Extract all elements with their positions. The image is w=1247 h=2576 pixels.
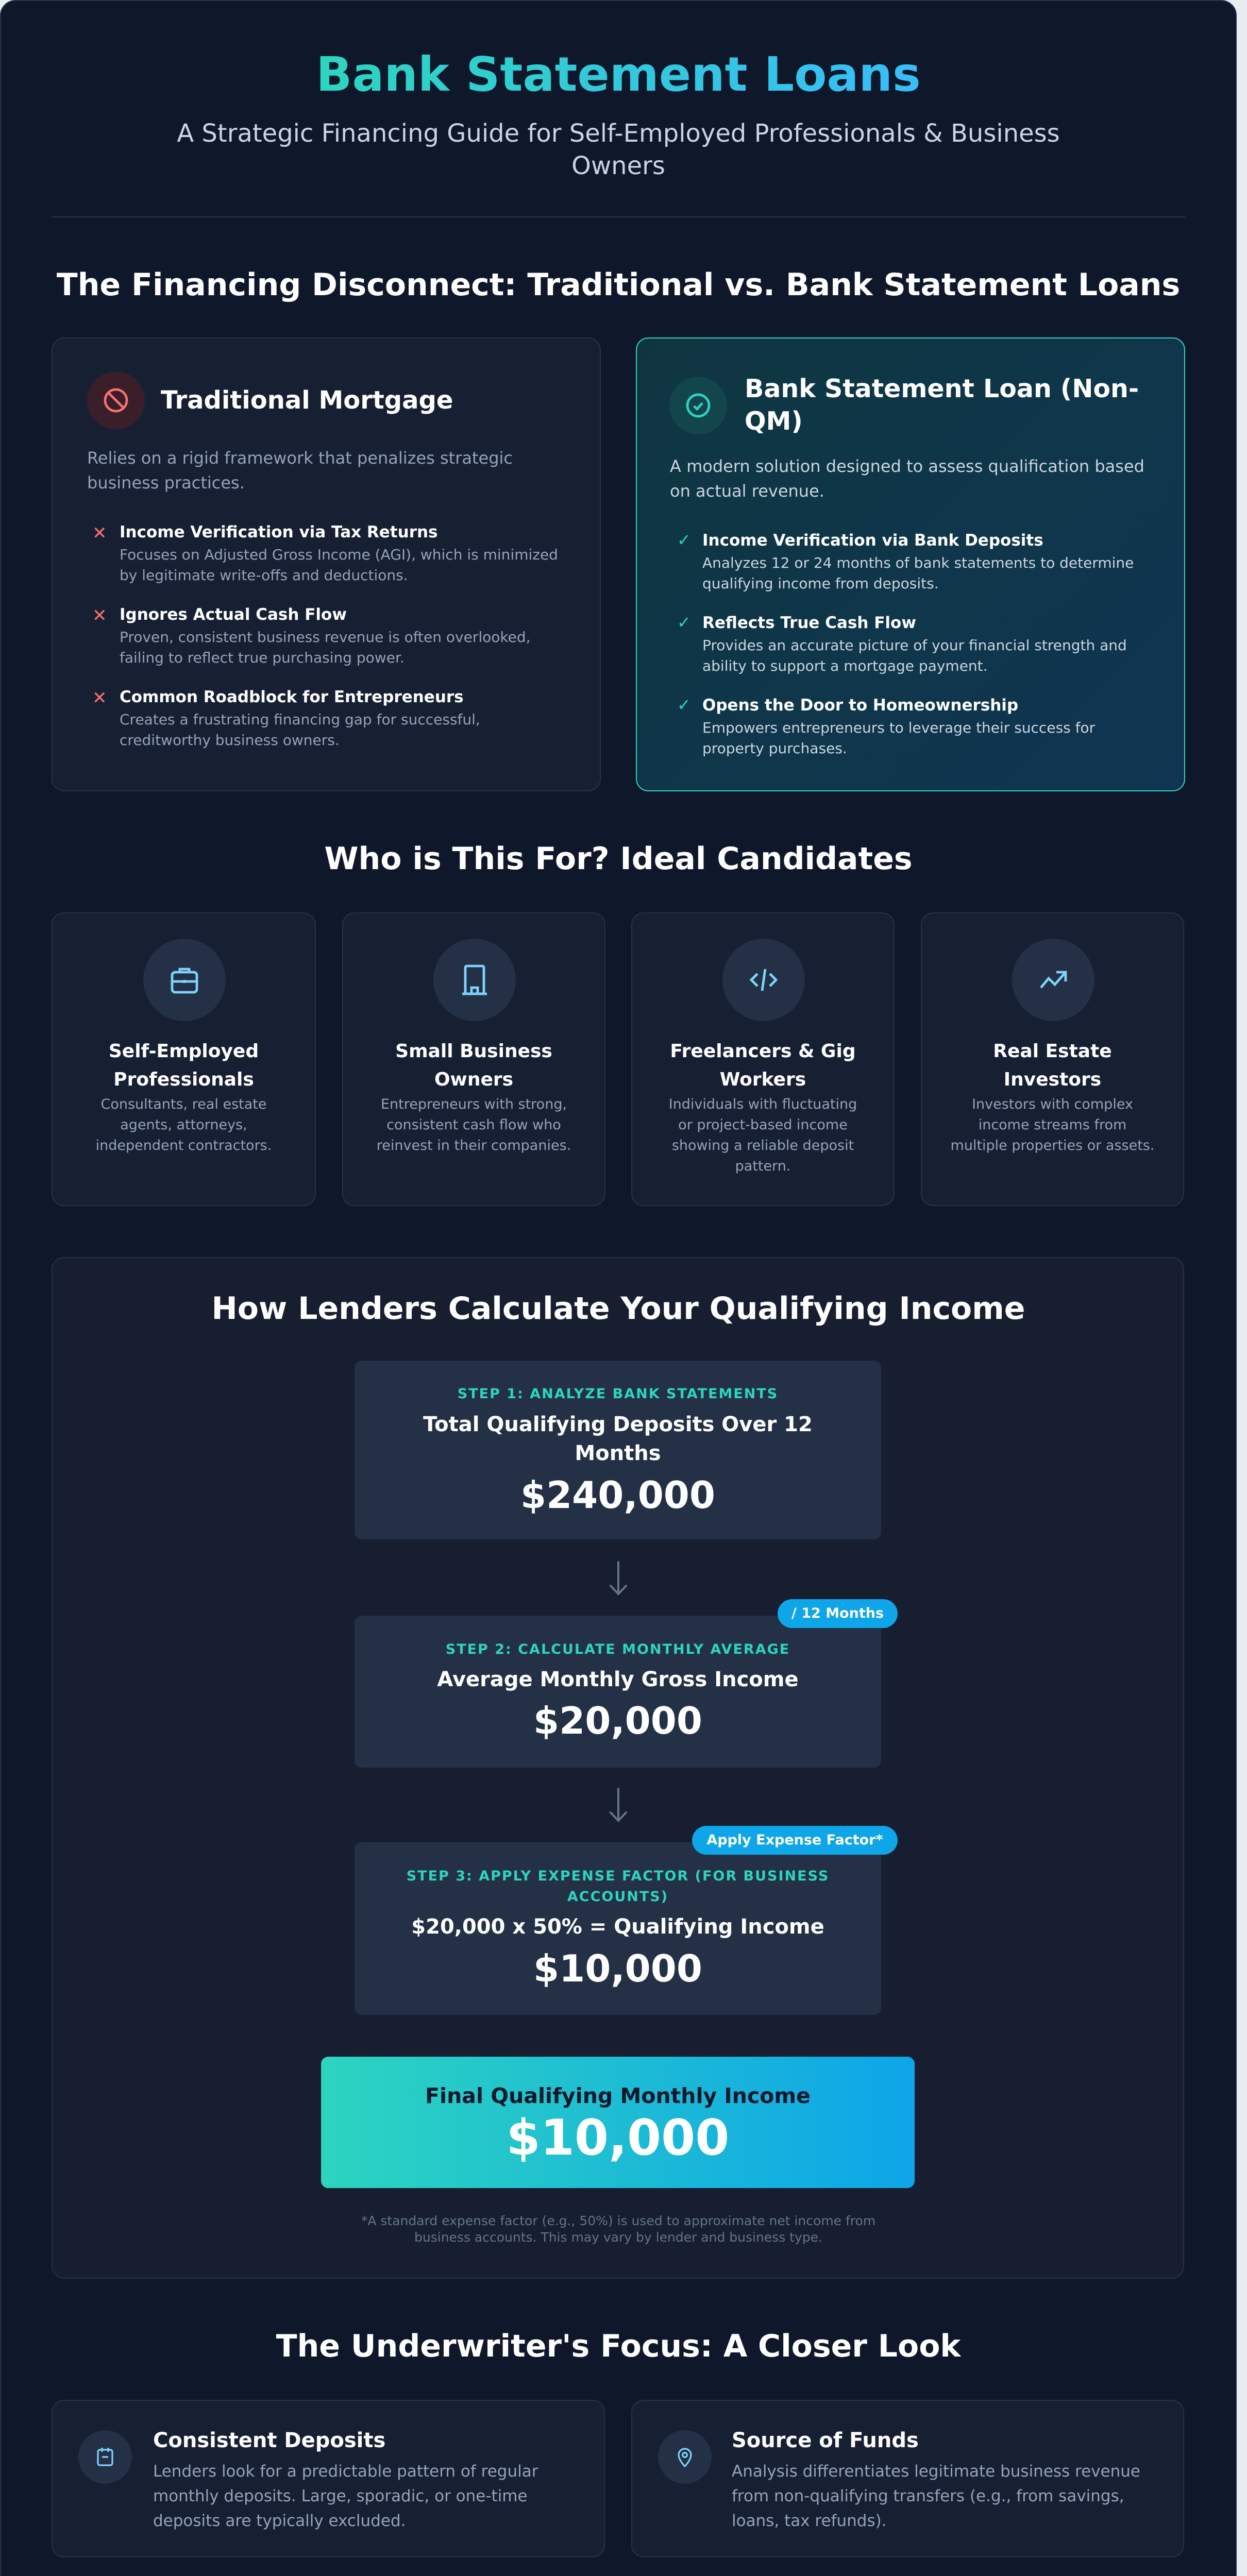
panel: traditional mortgage xyxy=(52,337,601,791)
title: Bank Statement Loans xyxy=(316,47,921,102)
step 1 xyxy=(355,1361,881,1539)
text: intro: A modern solution designed to assess qualification based on actual revenue. xyxy=(670,456,1144,501)
text: freelancers: Freelancers & Gig Workers xyxy=(670,1041,856,1090)
footnote: *A standard expense factor (e.g., 50%) is used to approximate net income from business accounts. This may vary by lender and business type. xyxy=(361,2213,875,2245)
badge: expense factor xyxy=(692,1826,898,1855)
text: small business: consistent cash flow who xyxy=(386,1117,561,1133)
final income box xyxy=(321,2057,915,2188)
heading: underwriter's focus: The Underwriter's Focus: A Closer Look xyxy=(276,2328,960,2364)
list: drawbacks: Ignores Actual Cash Flow xyxy=(120,605,347,624)
icon: location pin xyxy=(658,2430,712,2484)
text: consistent deposits: Consistent Deposits xyxy=(153,2429,385,2452)
list: drawbacks: Common Roadblock for Entrepreneurs xyxy=(120,688,464,706)
text: consistent deposits xyxy=(153,2429,538,2530)
text: source of funds: Source of Funds xyxy=(732,2429,919,2452)
step 1: STEP 1: ANALYZE BANK STATEMENTS xyxy=(458,1386,778,1402)
card: self-employed xyxy=(52,912,316,1206)
list: benefits: Analyzes 12 or 24 months of bank statements to determine qualifying income from deposits. xyxy=(702,554,1134,592)
text: small business: Small Business Owners xyxy=(395,1041,552,1090)
text: consistent deposits: Lenders look for a predictable pattern of regular monthly deposits. Large, sporadic, or one-time deposits are typically excluded. xyxy=(153,2462,538,2530)
list: benefits: ✓ xyxy=(677,530,691,550)
text: small business: Entrepreneurs with strong, xyxy=(381,1096,567,1112)
icon: briefcase xyxy=(143,939,226,1021)
list: benefits: Reflects True Cash Flow xyxy=(702,614,916,632)
step 3: $10,000 xyxy=(533,1947,702,1990)
list: benefits: Opens the Door to Homeownership xyxy=(702,696,1018,715)
step 1: $240,000 xyxy=(520,1473,715,1517)
step 1: Total Qualifying Deposits Over 12 Months xyxy=(423,1413,813,1465)
text: investors: Investors with complex xyxy=(972,1096,1133,1112)
text: freelancers: Individuals with fluctuating xyxy=(669,1096,857,1112)
list: drawbacks: ✕ xyxy=(92,605,107,626)
list: benefits: Empowers entrepreneurs to leverage their success for property purchases. xyxy=(702,719,1095,757)
heading: bank statement loan: Bank Statement Loan (Non-QM) xyxy=(745,374,1139,436)
heading: how lenders calculate: How Lenders Calculate Your Qualifying Income xyxy=(211,1291,1025,1327)
icon: building xyxy=(433,939,516,1021)
final income box: $10,000 xyxy=(507,2110,729,2166)
panel: qualifying income calculation xyxy=(52,1257,1184,2279)
text: source of funds: Analysis differentiates legitimate business revenue from non-qualifying transfers (e.g., from savings, loans, tax refunds). xyxy=(732,2462,1140,2530)
text: investors: income streams from xyxy=(979,1117,1126,1133)
list: drawbacks xyxy=(92,523,558,749)
list: benefits xyxy=(677,530,1134,757)
card: consistent deposits xyxy=(52,2400,605,2557)
card: freelancers xyxy=(631,912,895,1206)
list: benefits: ✓ xyxy=(677,613,691,632)
icon: trend xyxy=(1012,939,1094,1021)
text: intro: Relies on a rigid framework that penalizes strategic business practices. xyxy=(87,448,513,493)
list: drawbacks: Proven, consistent business revenue is often overlooked, failing to reflect true purchasing power. xyxy=(120,629,531,666)
badge: divide by 12: / 12 Months xyxy=(791,1605,884,1621)
step 2 xyxy=(355,1616,881,1768)
list: drawbacks: Income Verification via Tax Returns xyxy=(120,523,438,541)
step 2: Average Monthly Gross Income xyxy=(437,1668,799,1691)
text: source of funds xyxy=(732,2429,1140,2530)
text: investors: Real Estate Investors xyxy=(993,1041,1112,1090)
step 3: $20,000 x 50% = Qualifying Income xyxy=(411,1915,824,1939)
step 3 xyxy=(355,1842,881,2015)
text: self-employed: agents, attorneys, xyxy=(120,1117,247,1133)
text: self-employed: independent contractors. xyxy=(96,1138,272,1154)
list: benefits: ✓ xyxy=(677,695,691,715)
text: freelancers: pattern. xyxy=(735,1158,790,1174)
list: drawbacks: ✕ xyxy=(92,523,107,544)
subtitle: A Strategic Financing Guide for Self-Employed Professionals & Business Owners xyxy=(177,119,1060,180)
card: small business xyxy=(342,912,605,1206)
text: investors: multiple properties or assets. xyxy=(951,1138,1154,1154)
final income box: Final Qualifying Monthly Income xyxy=(425,2083,811,2108)
card: real estate investors xyxy=(921,912,1184,1206)
text: freelancers: or project-based income xyxy=(678,1117,848,1133)
list: drawbacks: ✕ xyxy=(92,688,107,708)
text: freelancers xyxy=(669,1041,857,1174)
list: drawbacks: Focuses on Adjusted Gross Income (AGI), which is minimized by legitimate write-offs and deductions. xyxy=(120,546,558,584)
panel: bank statement loan xyxy=(636,337,1185,791)
text: small business xyxy=(377,1041,571,1154)
heading: ideal candidates: Who is This For? Ideal Candidates xyxy=(324,841,913,877)
icon: calendar xyxy=(78,2430,132,2484)
text: small business: reinvest in their companies. xyxy=(377,1138,571,1154)
list: benefits: Provides an accurate picture of your financial strength and ability to support a mortgage payment. xyxy=(702,637,1127,674)
icon: check circle xyxy=(669,377,727,434)
step 3: STEP 3: APPLY EXPENSE FACTOR (FOR BUSINESS ACCOUNTS) xyxy=(407,1868,829,1905)
heading: traditional mortgage: Traditional Mortgage xyxy=(161,386,453,415)
step 2: STEP 2: CALCULATE MONTHLY AVERAGE xyxy=(446,1641,790,1657)
arrow 1 xyxy=(609,1561,628,1596)
text: investors xyxy=(951,1041,1154,1154)
step 2: $20,000 xyxy=(533,1699,702,1742)
heading: financing disconnect: The Financing Disconnect: Traditional vs. Bank Statement Loans xyxy=(57,267,1180,303)
icon: prohibited xyxy=(87,371,145,429)
badge: expense factor: Apply Expense Factor* xyxy=(706,1832,883,1848)
icon: code xyxy=(722,939,805,1021)
list: benefits: Income Verification via Bank Deposits xyxy=(702,531,1043,550)
text: self-employed xyxy=(96,1041,272,1154)
text: self-employed: Consultants, real estate xyxy=(101,1096,266,1112)
text: self-employed: Self-Employed Professionals xyxy=(109,1041,259,1090)
text: freelancers: showing a reliable deposit xyxy=(672,1138,854,1154)
card: source of funds xyxy=(631,2400,1184,2557)
arrow 2 xyxy=(609,1788,628,1822)
list: drawbacks: Creates a frustrating financing gap for successful, creditworthy business owners. xyxy=(120,711,480,749)
badge: divide by 12 xyxy=(778,1599,898,1628)
